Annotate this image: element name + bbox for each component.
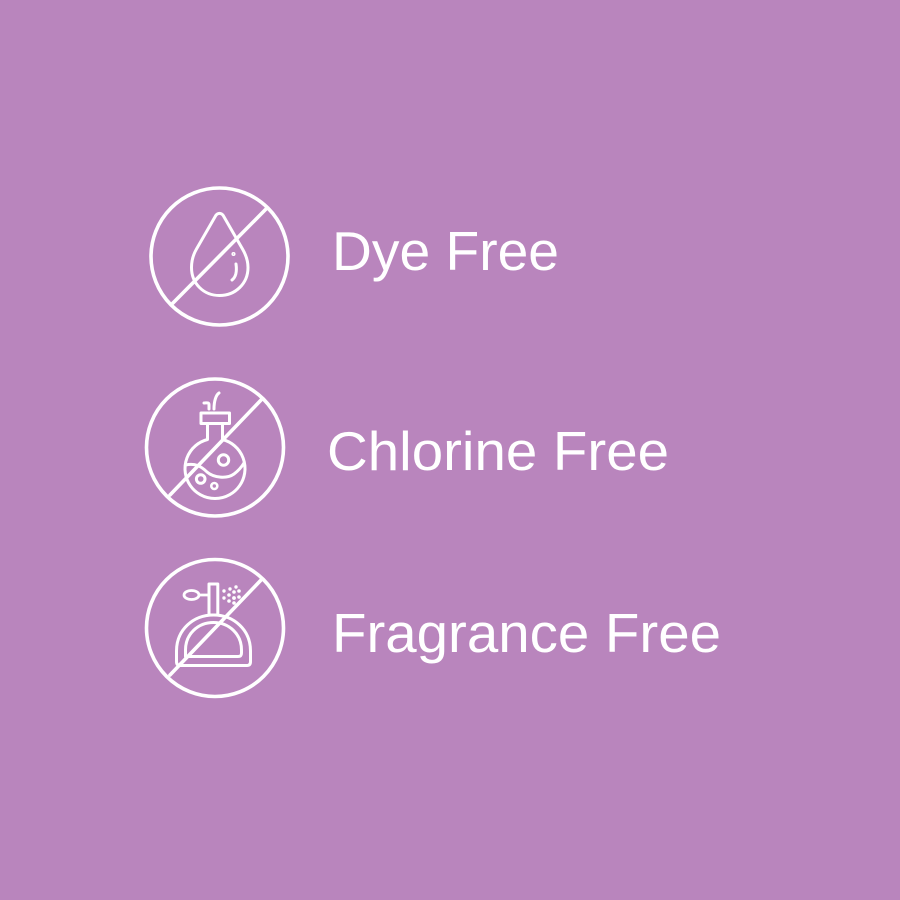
label: Dye Free: Dye Free [332,220,559,282]
icon: crossed-out chemical flask [146,379,284,516]
label: Fragrance Free: Fragrance Free [332,602,721,664]
icon: crossed-out dye drop [151,188,288,325]
icon: perfume spray dots [222,585,241,605]
label: Chlorine Free: Chlorine Free [327,420,669,482]
icon: crossed-out perfume bottle [146,560,284,696]
